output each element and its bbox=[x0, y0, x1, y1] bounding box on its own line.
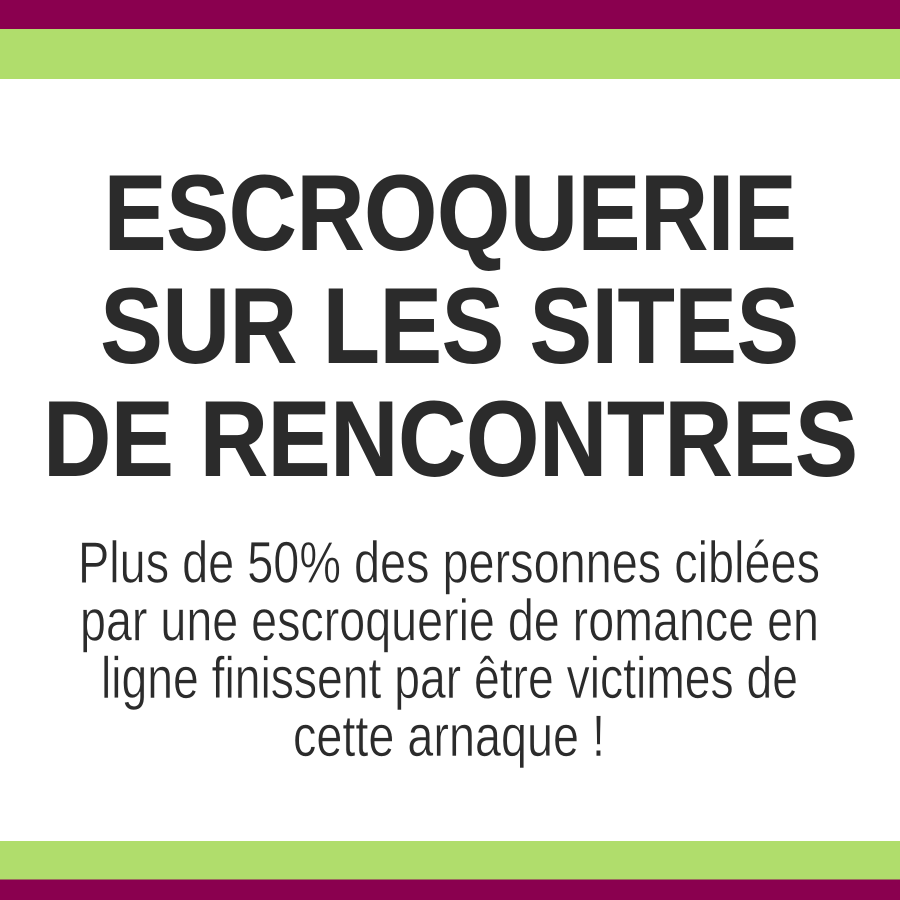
subtitle text: cette arnaque ! bbox=[293, 704, 605, 769]
title: ESCROQUERIE bbox=[104, 153, 796, 273]
bottom maroon band bbox=[0, 880, 900, 900]
top green band bbox=[0, 29, 900, 79]
top maroon band bbox=[0, 0, 900, 29]
bottom green band bbox=[0, 841, 900, 880]
title: SUR LES SITES bbox=[100, 266, 799, 386]
title bbox=[43, 153, 858, 499]
subtitle text bbox=[78, 531, 820, 769]
